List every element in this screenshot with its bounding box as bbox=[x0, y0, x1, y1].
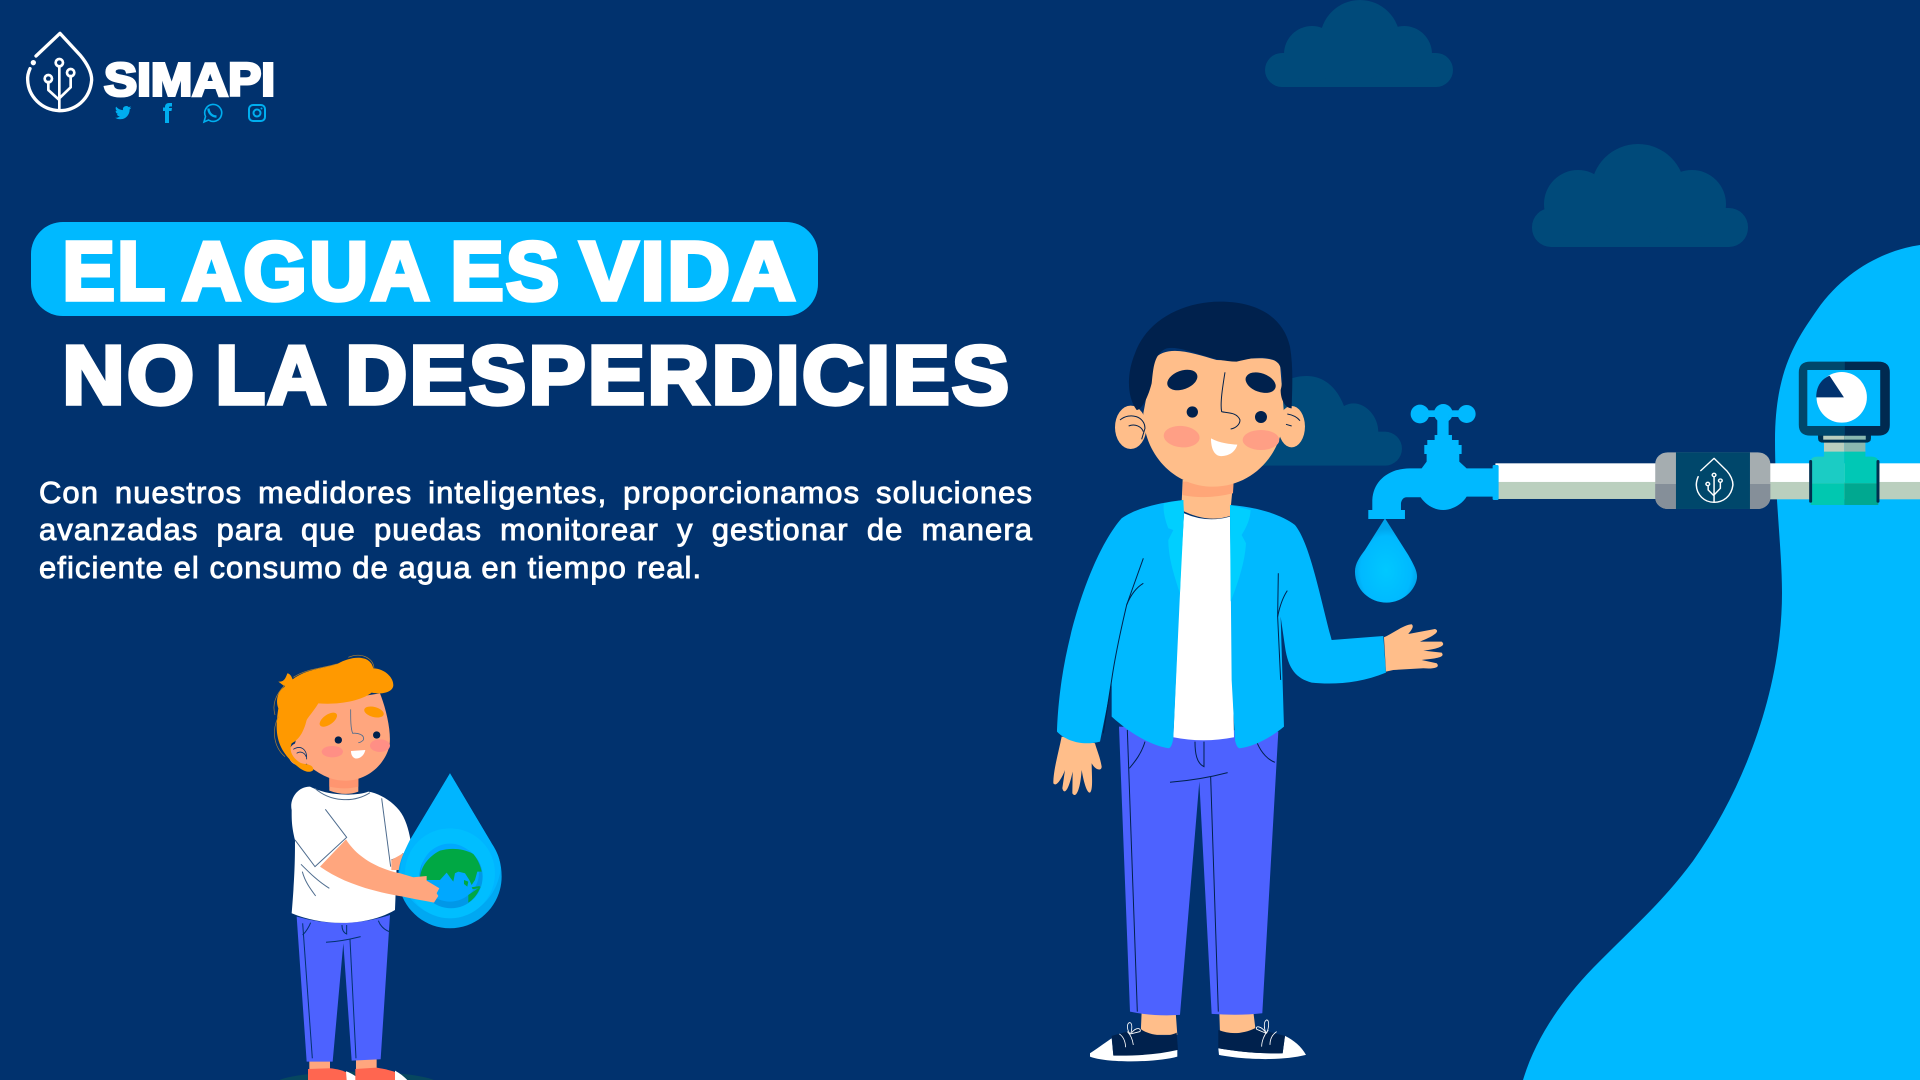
paragraph: eficiente el consumo de agua en tiempo real. bbox=[39, 550, 702, 585]
left shoe bbox=[1090, 1023, 1178, 1061]
meter screen with pie dial bbox=[1799, 362, 1890, 436]
water shape right bbox=[1523, 245, 1920, 1080]
ground shadow bbox=[273, 1072, 440, 1080]
globe bbox=[419, 844, 483, 908]
cloud: middle right bbox=[1532, 144, 1748, 247]
paragraph: Con nuestros medidores inteligentes, proporcionamos soluciones bbox=[39, 475, 1033, 510]
title line 1: VIDA bbox=[580, 224, 798, 318]
paragraph: avanzadas para que puedas monitorear y gestionar de manera bbox=[39, 512, 1033, 547]
right shoe bbox=[1218, 1020, 1306, 1059]
logo: SIMAPI bbox=[28, 33, 275, 123]
boy ear and face bbox=[288, 693, 390, 781]
right hand bbox=[1384, 624, 1443, 672]
icon: whatsapp bbox=[204, 104, 222, 122]
title line 1 bbox=[62, 224, 798, 318]
title line 1: AGUA bbox=[182, 224, 432, 318]
jacket left bbox=[1057, 500, 1183, 748]
drop with globe bbox=[398, 773, 502, 928]
title line 2: LA bbox=[216, 328, 328, 422]
boy facial features bbox=[317, 705, 390, 759]
icon: logo drop bbox=[28, 33, 92, 111]
man character bbox=[1053, 302, 1499, 1061]
cloud: top bbox=[1265, 0, 1453, 87]
jacket right and arm bbox=[1230, 505, 1386, 748]
boy legs and trousers bbox=[297, 915, 390, 1072]
title line 1: ES bbox=[450, 224, 562, 318]
title line 1: EL bbox=[62, 224, 168, 318]
shirt lines bbox=[295, 788, 403, 896]
icon: instagram bbox=[249, 105, 265, 121]
ears bbox=[1115, 406, 1305, 449]
pipe segment left bbox=[1495, 463, 1658, 499]
paragraph bbox=[39, 475, 1033, 585]
title line 2 bbox=[62, 328, 1012, 422]
logo wordmark: SIMAPI bbox=[104, 54, 275, 106]
icon: twitter bbox=[115, 106, 131, 119]
meter coupling with logo bbox=[1655, 452, 1770, 509]
boy neck bbox=[329, 777, 358, 794]
hair bbox=[1129, 302, 1292, 410]
title line 2: NO bbox=[62, 328, 196, 422]
boy front arm and hand bbox=[320, 839, 439, 903]
title line 2: DESPERDICIES bbox=[346, 328, 1012, 422]
back hand bbox=[391, 853, 410, 870]
jacket fold lines bbox=[1103, 558, 1287, 733]
legs and trousers bbox=[1119, 727, 1278, 1035]
face bbox=[1143, 351, 1284, 487]
t-shirt bbox=[1173, 513, 1234, 740]
icon: facebook bbox=[163, 103, 172, 123]
facial features bbox=[1120, 366, 1300, 456]
boy t-shirt bbox=[291, 787, 412, 923]
boy shoes bbox=[308, 1068, 407, 1080]
jacket lapels bbox=[1164, 500, 1251, 602]
faucet bbox=[1368, 404, 1499, 519]
water drop bbox=[1355, 518, 1417, 603]
teal valve bbox=[1809, 435, 1879, 505]
pipe segment right bbox=[1767, 463, 1920, 499]
left hand bbox=[1053, 737, 1102, 795]
boy hair bbox=[274, 655, 393, 772]
neck bbox=[1181, 480, 1234, 519]
pipe and smart meter bbox=[1495, 362, 1920, 509]
title pill bbox=[31, 222, 818, 316]
cloud: behind man bbox=[1257, 376, 1402, 466]
boy character bbox=[273, 655, 502, 1080]
